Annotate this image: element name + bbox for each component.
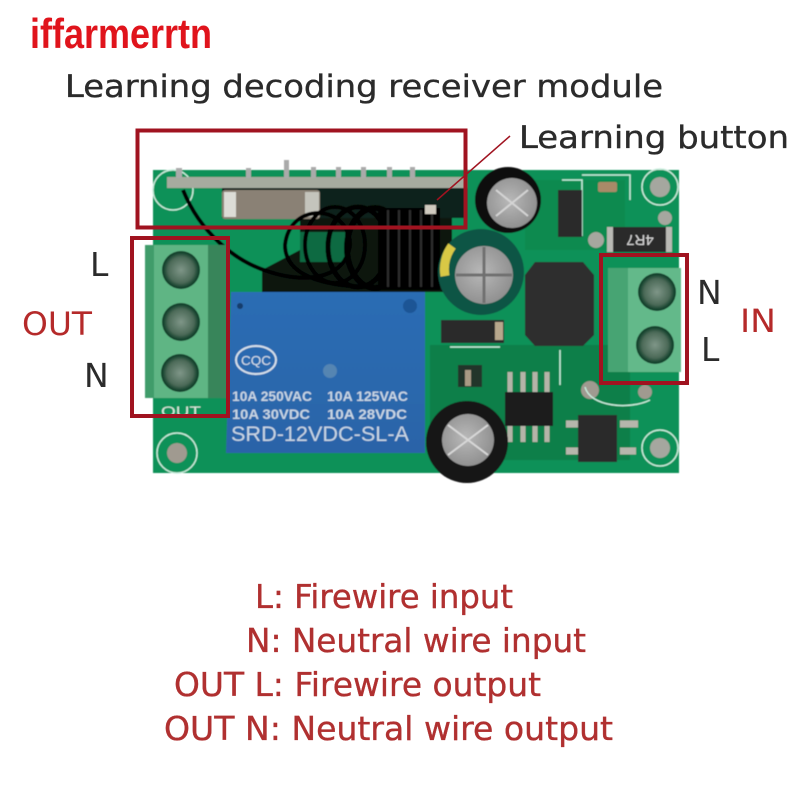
- diode M7: [558, 190, 582, 237]
- controller IC: [505, 372, 553, 442]
- resistor 4R7: 4R7: [626, 231, 654, 248]
- resistor 4R7: [607, 227, 672, 252]
- bridge rectifier: [566, 415, 638, 462]
- mounting holes: [153, 169, 678, 473]
- relay: 10A 125VAC: [327, 388, 408, 404]
- relay: 10A 28VDC: [327, 406, 407, 422]
- relay: 10A 30VDC: [232, 406, 310, 422]
- schottky diode: [441, 320, 504, 343]
- small chip capacitor: [598, 182, 617, 192]
- legend line: OUT N: OUT N: Neutral wire output: [164, 709, 613, 748]
- highlight box: input terminals: [601, 255, 687, 383]
- relay: [226, 292, 425, 453]
- silkscreen label: OUT: OUT: [161, 403, 202, 419]
- relay: SRD-12VDC-SL-A: [231, 423, 409, 446]
- highlight box: receiver and learning button: [138, 130, 466, 228]
- label: input N: N: [697, 273, 722, 312]
- legend: wire definitions: [164, 577, 613, 748]
- circuit board photo: [145, 160, 681, 483]
- capacitor: bottom black: [426, 401, 508, 483]
- legend line: L: L: Firewire input: [255, 577, 513, 616]
- highlight box: output terminals: [132, 238, 228, 416]
- arrow: learning button pointer: [437, 136, 510, 200]
- small regulator: [458, 365, 482, 387]
- label: IN: IN: [740, 302, 776, 340]
- silkscreen traces: [450, 175, 650, 406]
- inductor: [525, 262, 594, 346]
- heading: module name: Learning decoding receiver module: [65, 69, 663, 105]
- label: output L: L: [90, 245, 109, 284]
- label: output N: N: [84, 356, 109, 395]
- capacitor: green: [438, 229, 524, 315]
- crystal: [222, 190, 320, 219]
- antenna coil: [183, 190, 440, 290]
- right terminal block: [608, 268, 681, 372]
- label: OUT: OUT: [22, 305, 92, 343]
- left terminal block: [145, 245, 228, 398]
- legend line: OUT L: OUT L: Firewire output: [174, 665, 541, 704]
- label: input L: L: [701, 330, 720, 369]
- learning button: [425, 205, 436, 214]
- legend line: N: N: Neutral wire input: [246, 621, 586, 660]
- dark shadow under coil: [262, 215, 452, 292]
- title: brand name: iffarmerrtn: [30, 10, 212, 57]
- label: learning button: Learning button: [519, 120, 789, 156]
- receiver module strip: [167, 160, 467, 219]
- relay: CQC: [241, 353, 271, 368]
- relay: 10A 250VAC: [232, 388, 312, 404]
- capacitor: top black: [475, 167, 541, 233]
- board substrate: [153, 170, 679, 473]
